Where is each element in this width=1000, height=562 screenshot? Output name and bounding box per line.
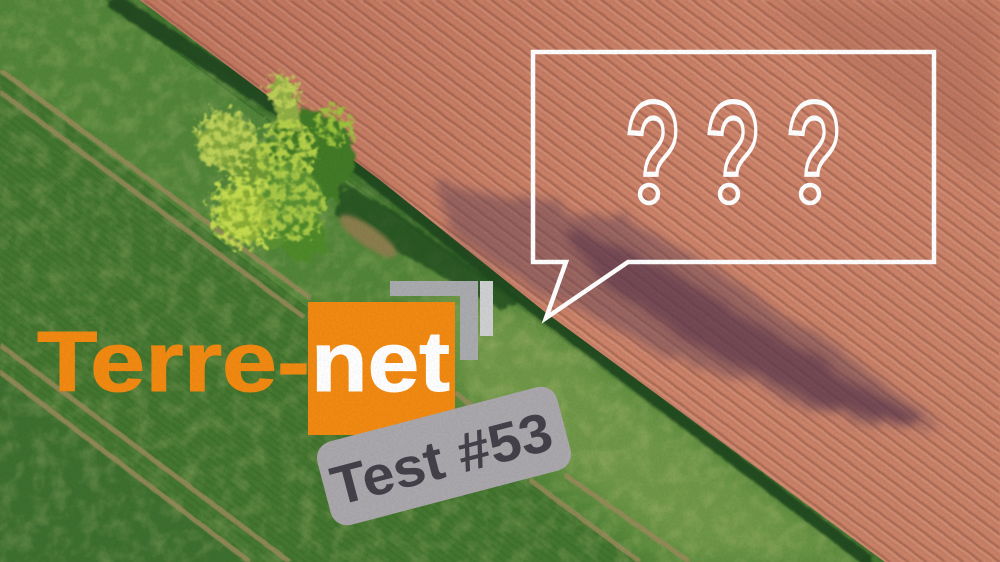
dark hedge along field edge	[112, 0, 870, 562]
tractor tracks	[0, 70, 690, 562]
tree canopy base	[199, 72, 356, 262]
logo corner marks	[390, 281, 493, 360]
test number badge: Test #53	[324, 400, 559, 517]
tree	[193, 72, 356, 262]
question marks	[627, 99, 838, 206]
tree shadow on grass	[335, 180, 520, 310]
tree leaf highlights	[193, 74, 355, 250]
question marks: ?	[705, 73, 761, 237]
logo wordmark: net	[311, 315, 450, 410]
logo	[37, 281, 493, 435]
question marks: ?	[786, 73, 842, 237]
logo wordmark: Terre-	[37, 315, 310, 410]
test number badge	[313, 383, 575, 529]
speech bubble	[533, 52, 934, 318]
tree shadow on red field	[440, 190, 945, 430]
question marks: ?	[625, 73, 681, 237]
logo orange square	[308, 302, 455, 435]
logo wordmark	[37, 315, 450, 410]
bare patch by tree	[334, 208, 402, 264]
